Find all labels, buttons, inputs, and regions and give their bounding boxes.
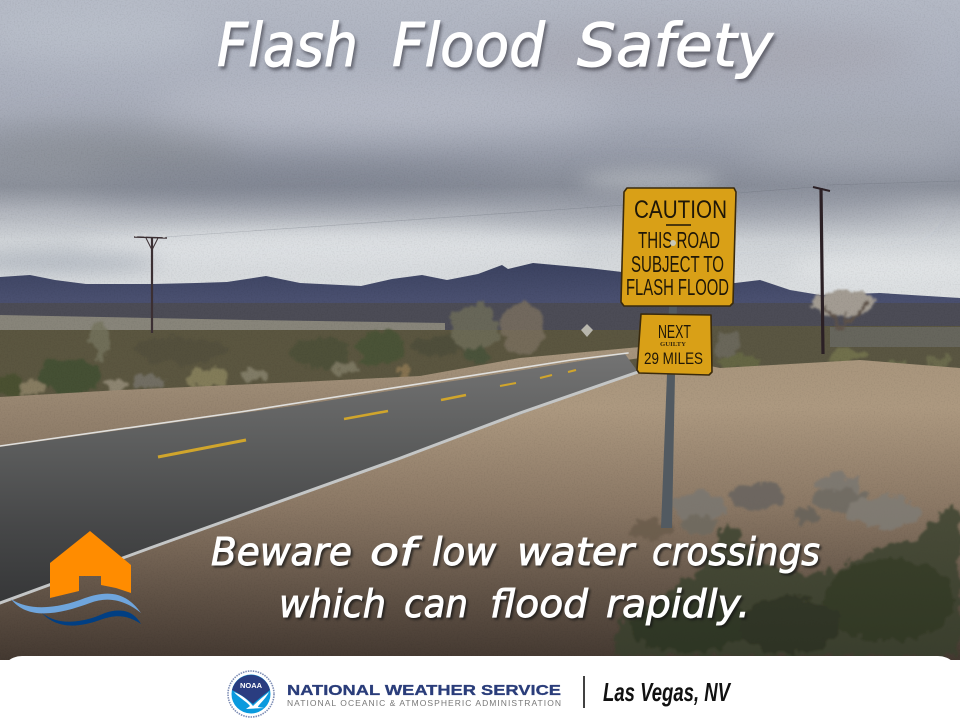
distant diamond road sign [581,324,593,337]
caption: can [404,582,468,626]
sand right of road [0,352,960,660]
right utility pole [813,187,830,354]
mountains [0,263,960,330]
icon: flooded house logo [11,531,141,626]
footer bar [0,656,960,720]
title: Flood [392,11,546,81]
caption: water [517,530,637,574]
NWS wordmark [287,682,561,708]
road sign: caution flash flood [621,188,736,306]
chain-link fence [830,327,960,347]
caption: flood [490,582,589,626]
dead tree [813,291,877,330]
title [217,11,775,81]
road sign: next 29 miles: 29 MILES [644,349,703,368]
NWS wordmark: NATIONAL OCEANIC & ATMOSPHERIC ADMINISTRATION [287,698,561,708]
caption: rapidly. [606,582,750,626]
caption: Beware [211,530,352,574]
icon: NOAA logo: NOAA [240,681,263,690]
icon: NOAA logo [228,671,274,717]
sky with clouds [0,0,960,300]
green bushes lower right [612,505,960,656]
caption: of [370,530,423,574]
road sign: caution flash flood: FLASH FLOOD [626,274,729,300]
road centre dashes [158,370,576,457]
road sign: next 29 miles [637,314,712,375]
road sign: next 29 miles: NEXT [658,322,691,342]
title: Flash [217,11,358,81]
road sign: next 29 miles: GUILTY [660,342,687,348]
road sign: caution flash flood: SUBJECT TO [631,251,724,277]
distant valley floor [0,303,960,337]
road sign post [661,305,677,528]
NWS wordmark: NATIONAL WEATHER SERVICE [287,682,561,699]
title: Safety [577,11,775,81]
caption: low [432,530,497,574]
sand left of road [0,347,640,450]
road sign: caution flash flood: CAUTION [634,196,727,224]
office location: Las Vegas, NV [603,677,732,707]
roadside shrubs lower right [630,475,921,541]
road sign: caution flash flood: THIS ROAD [638,227,720,253]
overhead wires [165,181,960,237]
caption [211,530,820,626]
left utility pole [134,233,167,333]
desert scrub band [0,302,960,405]
road edge lines [0,353,638,603]
caption: which [279,582,386,626]
road surface [0,354,638,602]
caption: crossings [652,530,820,574]
